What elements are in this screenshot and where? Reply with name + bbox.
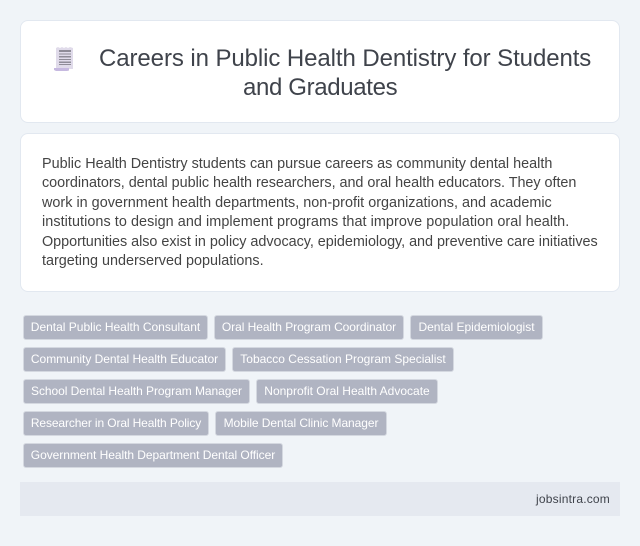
description text: targeting underserved populations. <box>42 253 264 269</box>
footer bar <box>20 482 620 516</box>
tag: Dental Epidemiologist <box>418 320 535 334</box>
icon: document scroll <box>54 47 73 71</box>
tag: Nonprofit Oral Health Advocate <box>264 384 430 398</box>
title: Careers in Public Health Dentistry for Students <box>99 45 591 72</box>
tag <box>23 347 226 372</box>
description text <box>42 156 598 269</box>
footer source text: jobsintra.com <box>536 492 610 506</box>
career tags <box>23 315 543 468</box>
tag <box>23 443 283 468</box>
description text: Opportunities also exist in policy advocacy, epidemiology, and preventive care initiatives <box>42 234 598 250</box>
description panel <box>20 133 620 292</box>
title <box>99 45 591 101</box>
description text: coordinators, dental public health researchers, and oral health educators. They often <box>42 175 576 191</box>
tag: School Dental Health Program Manager <box>31 384 242 398</box>
tag <box>410 315 543 340</box>
tag <box>23 379 250 404</box>
tag: Mobile Dental Clinic Manager <box>224 416 378 430</box>
tag: Dental Public Health Consultant <box>31 320 200 334</box>
description text: Public Health Dentistry students can pursue careers as community dental health <box>42 156 552 172</box>
tag <box>256 379 438 404</box>
tag: Government Health Department Dental Officer <box>31 448 275 462</box>
description text: institutions to design and implement programs that improve population oral health. <box>42 214 569 230</box>
tag <box>214 315 404 340</box>
tag <box>23 411 209 436</box>
tag: Community Dental Health Educator <box>31 352 218 366</box>
tag: Researcher in Oral Health Policy <box>31 416 201 430</box>
tag <box>215 411 387 436</box>
tag: Tobacco Cessation Program Specialist <box>240 352 446 366</box>
description text: work in government health departments, non-profit organizations, and academic <box>42 194 552 210</box>
tag <box>232 347 454 372</box>
header panel <box>20 20 620 123</box>
tag <box>23 315 208 340</box>
tag: Oral Health Program Coordinator <box>222 320 396 334</box>
title: and Graduates <box>243 74 397 101</box>
